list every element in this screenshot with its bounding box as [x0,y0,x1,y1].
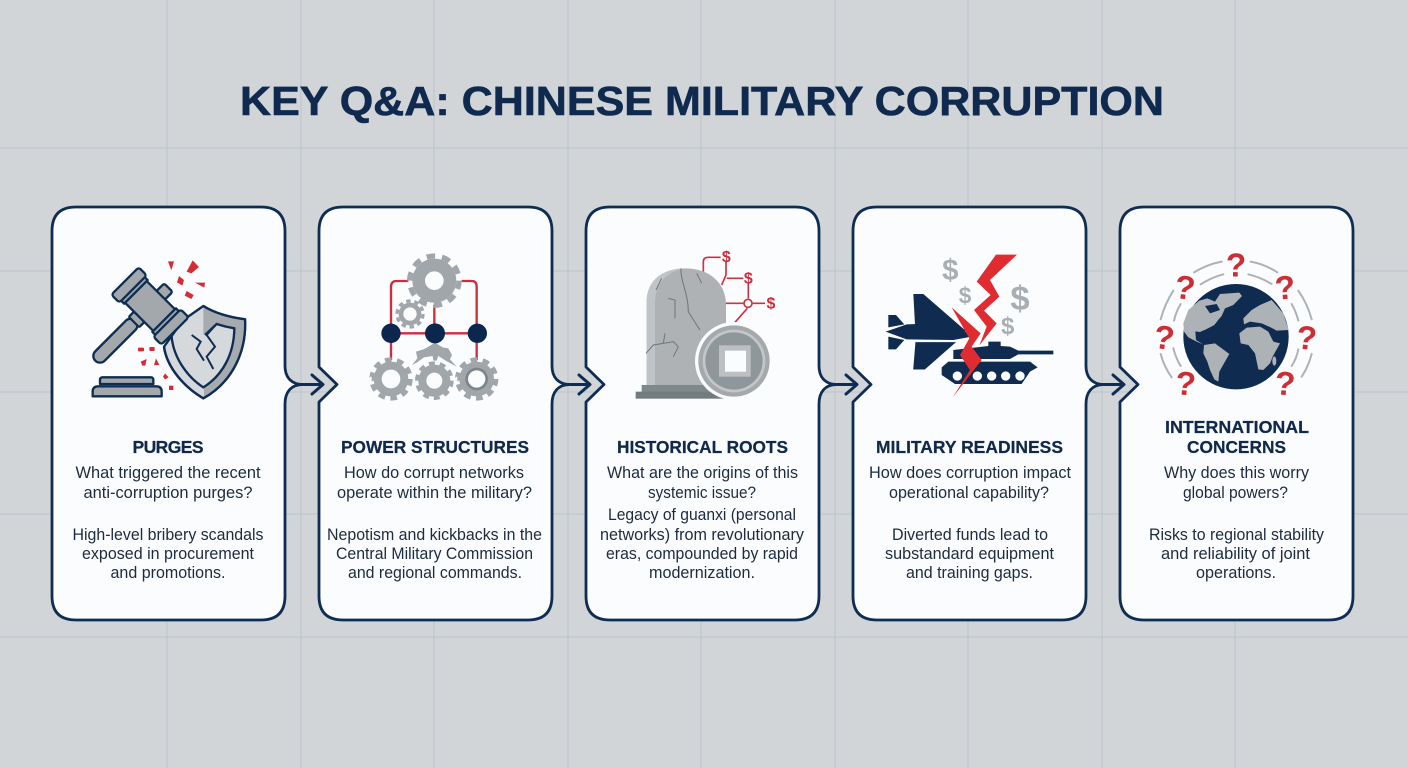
panel: international concerns: global powers? [1183,484,1288,502]
icon: jet and tank split by lightning: $ [959,283,972,309]
arrow: purges to power structures [300,375,323,394]
heading [1165,417,1309,457]
heading: PURGES [132,437,204,457]
icon: gears and network [372,256,496,398]
answer: High-level bribery scandals [72,526,264,544]
card outline [586,207,836,620]
icon: globe with question marks: ? [1226,248,1246,285]
card outline [319,207,569,620]
icon: globe with question marks [1151,248,1318,404]
panel: purges: and promotions. [110,564,226,582]
panel: purges: anti-corruption purges? [84,484,252,502]
icon: globe with question marks: ? [1295,320,1318,358]
arrow: power structures to historical roots [567,375,590,394]
question: How do corrupt networks [344,464,524,482]
panel: historical roots: modernization. [649,564,755,582]
heading: CONCERNS [1187,437,1286,457]
panel: historical roots [586,207,836,620]
answer: Legacy of guanxi (personal [608,506,796,524]
question: What triggered the recent [76,464,261,482]
card outline [52,207,302,620]
icon: cracked monument and coin: $ [722,249,731,266]
answer: Risks to regional stability [1149,526,1325,544]
panel: military readiness [853,207,1103,620]
panel: power structures: Central Military Commission [336,545,533,563]
icon: cracked monument and coin: $ [744,270,753,287]
icon: jet and tank split by lightning: $ [1001,313,1014,340]
icon: jet and tank split by lightning: $ [942,254,958,287]
arrow: military readiness to international concerns [1101,375,1124,394]
panel: military readiness: and training gaps. [906,564,1033,582]
panel: historical roots: networks) from revolutionary [600,526,805,544]
answer: Diverted funds lead to [892,526,1048,544]
title: KEY Q&A: CHINESE MILITARY CORRUPTION [240,78,1164,124]
question: What are the origins of this [607,464,798,482]
icon: globe with question marks: ? [1172,269,1197,308]
icon: cracked monument and coin: $ [767,296,776,313]
arrow: historical roots to military readiness [834,375,857,394]
icon: gavel striking cracked shield [70,260,245,398]
heading: MILITARY READINESS [876,437,1063,457]
icon: globe with question marks: ? [1174,365,1197,404]
icon: jet and tank split by lightning: $ [1010,280,1030,318]
answer: Nepotism and kickbacks in the [327,526,542,544]
card outline [853,207,1103,620]
panel: power structures: and regional commands. [348,564,522,582]
icon: globe with question marks: ? [1273,269,1297,308]
heading: HISTORICAL ROOTS [617,437,788,457]
panel: international concerns [1120,207,1353,620]
icon: jet and tank split by lightning [886,254,1053,397]
panel: historical roots: systemic issue? [648,484,756,502]
icon: globe with question marks: ? [1151,319,1177,358]
heading: POWER STRUCTURES [341,437,529,457]
question: How does corruption impact [869,464,1071,482]
panel: military readiness: operational capability? [889,484,1049,502]
panel: purges: exposed in procurement [82,545,254,563]
panel: international concerns: operations. [1196,564,1276,582]
icon: cracked monument and coin [636,249,776,400]
panel: historical roots: eras, compounded by rapid [606,545,798,563]
panel: power structures [319,207,569,620]
card outline [1120,207,1353,620]
question: Why does this worry [1164,464,1310,482]
panel: power structures: operate within the military? [337,484,532,502]
panel: purges [52,207,302,620]
panel: military readiness: substandard equipment [885,545,1054,563]
panel: international concerns: and reliability of joint [1161,545,1310,563]
icon: globe with question marks: ? [1273,365,1297,404]
heading: INTERNATIONAL [1165,417,1309,437]
